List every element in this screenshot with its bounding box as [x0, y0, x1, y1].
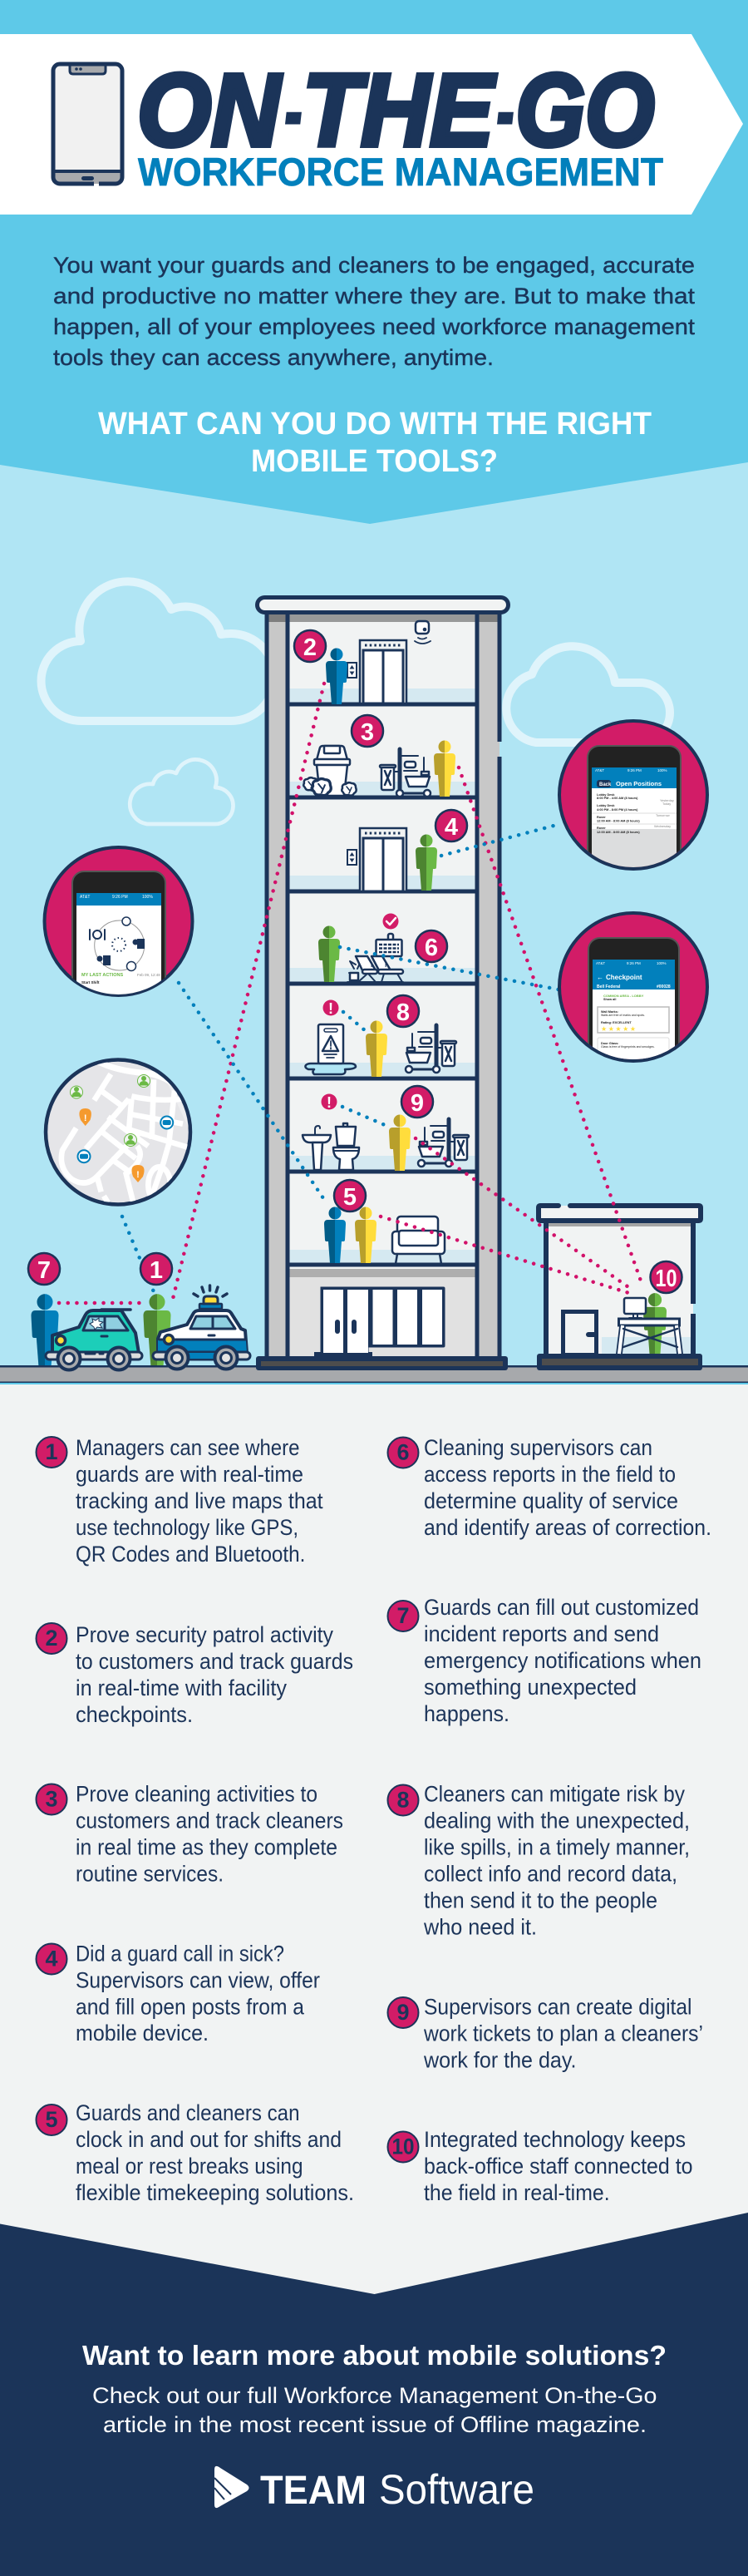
list item 7: Guards can fill out customized: [424, 1595, 699, 1620]
icon: cleaning cart: [418, 1119, 469, 1167]
callout: phone open positions app: Yesterday: [660, 799, 674, 802]
list item 7: happens.: [424, 1701, 509, 1726]
list item 10: 10: [392, 2134, 414, 2159]
callout: phone open positions app: AT&T: [595, 768, 604, 772]
list item 8: dealing with the unexpected,: [424, 1808, 690, 1833]
roof: [258, 597, 509, 612]
section question heading: MOBILE TOOLS?: [251, 444, 498, 479]
list item 8: then send it to the people: [424, 1888, 657, 1912]
list item 1: guards are with real-time: [76, 1462, 303, 1487]
callout: phone open positions app: 12:00 AM - 8:00 AM (8 hours): [597, 831, 640, 834]
list item 3: customers and track cleaners: [76, 1808, 343, 1833]
list item 2: to customers and track guards: [76, 1649, 353, 1674]
heading: Workforce Management: WORKFORCE MANAGEMENT: [138, 150, 663, 194]
ground: [0, 1365, 748, 1384]
header background chevron: [0, 0, 748, 524]
list item 8: like spills, in a timely manner,: [424, 1834, 690, 1859]
footer heading: Want to learn more about mobile solutions?: [82, 2340, 667, 2371]
section question heading: WHAT CAN YOU DO WITH THE RIGHT: [98, 407, 652, 442]
icon: elevator: [360, 828, 406, 891]
foundation slab: [537, 1354, 702, 1370]
intro paragraph: [53, 253, 696, 370]
heading: On-the-Go: THE: [303, 53, 496, 168]
footer text: Check out our full Workforce Management On-the-Go: [92, 2383, 657, 2408]
list item 4: and fill open posts from a: [76, 1994, 305, 2019]
heading: On-the-Go: [137, 52, 655, 168]
icon: elevator: [360, 640, 406, 703]
icon: computer desk: [617, 1298, 682, 1354]
list item 2: checkpoints.: [76, 1702, 193, 1727]
person: guard: [324, 1207, 346, 1263]
list item 5: [37, 2100, 354, 2205]
callout: phone checkpoint app: Rating: EXCELLENT: [601, 1021, 632, 1024]
badge 8: 8: [396, 999, 410, 1026]
panel: footer: [0, 2213, 748, 2576]
list item 6: 6: [396, 1440, 410, 1465]
floor: elevator and supervisor: [347, 828, 437, 891]
list item 9: [387, 1994, 703, 2072]
floor: washroom: [303, 1094, 469, 1171]
floor: spill: [305, 999, 456, 1077]
floor: guard at elevator with checkpoint: [326, 621, 431, 704]
map markers: !: [84, 1113, 87, 1123]
list item 1: use technology like GPS,: [76, 1515, 298, 1540]
callout: phone clock-in app: Start Shift: [81, 980, 100, 985]
callout: phone checkpoint app: [559, 913, 707, 1079]
list item 3: [37, 1781, 343, 1886]
sky background: [0, 449, 748, 1368]
footer text: [92, 2383, 657, 2437]
callout: phone clock-in app: MY LAST ACTIONS: [81, 973, 123, 978]
list item 9: work tickets to plan a cleaners’: [423, 2021, 703, 2046]
badge 6: 6: [425, 935, 438, 961]
list item 6: determine quality of service: [424, 1488, 678, 1513]
list item 1: tracking and live maps that: [76, 1488, 323, 1513]
callout: phone open positions app: 12:00 AM - 8:00 AM (8 hours): [597, 820, 640, 823]
icon: cleaning cart: [406, 1025, 456, 1073]
icon: teal car: [46, 1310, 142, 1370]
callout: phone checkpoint app: ←: [597, 974, 603, 981]
list item 4: Supervisors can view, offer: [76, 1967, 320, 1992]
list item 7: [387, 1595, 701, 1726]
list item 3: routine services.: [76, 1861, 224, 1886]
icon: armchair: [392, 1216, 445, 1264]
icon: siren: [194, 1286, 227, 1309]
badge 1: [140, 1253, 172, 1285]
person: cleaner: [355, 1207, 376, 1263]
icon: waiting chairs and plant: i: [385, 961, 386, 969]
callout: phone clock-in app: AT&T: [80, 895, 90, 900]
list item 2: 2: [45, 1626, 58, 1651]
callout: phone open positions app: 9:26 PM: [627, 768, 642, 772]
icon: alert: !: [328, 1000, 333, 1017]
list item 10: [387, 2127, 693, 2205]
person: supervisor: [318, 926, 340, 982]
list item 1: QR Codes and Bluetooth.: [76, 1542, 305, 1567]
callout: phone checkpoint app: Bell Federal: [597, 985, 621, 989]
foundation slab: [256, 1356, 508, 1370]
heading: On-the-Go: -: [495, 52, 515, 167]
badge 2: 2: [303, 634, 317, 661]
intro paragraph: You want your guards and cleaners to be engaged, accurate: [53, 253, 695, 278]
icon: police car: [153, 1286, 250, 1369]
roof: [539, 1206, 701, 1221]
icon: crumpled papers: [303, 777, 357, 796]
list item 2: [37, 1622, 353, 1727]
list item 5: 5: [45, 2107, 58, 2132]
list item 5: flexible timekeeping solutions.: [76, 2180, 354, 2205]
callout: phone clock-in app: [45, 847, 193, 1013]
callout: phone checkpoint app: Checkpoint: [606, 974, 642, 981]
badge 3: 3: [361, 719, 374, 746]
floor: trash and cleaner: [303, 740, 455, 797]
list item 8: who need it.: [423, 1914, 537, 1939]
icon: toilet: [333, 1123, 359, 1170]
callout: phone checkpoint app: AT&T: [596, 961, 605, 965]
badge 2: [294, 630, 326, 662]
icon: notice board: [376, 934, 402, 956]
icon: alert: [322, 999, 339, 1017]
list item 3: Prove cleaning activities to: [76, 1781, 317, 1806]
icon: water puddle: [305, 1063, 356, 1074]
panel: numbered list: [0, 1384, 748, 2299]
callout: phone open positions app: Today: [662, 802, 671, 806]
main office building: [256, 597, 509, 1370]
badge 1: 1: [150, 1257, 163, 1284]
icon: waiting chairs and plant: [347, 956, 403, 982]
person: guard 1: [143, 1294, 171, 1365]
logo: TEAM Software: Software: [379, 2466, 534, 2513]
list item 9: 9: [396, 2000, 410, 2025]
intro paragraph: happen, all of your employees need workforce management: [53, 314, 696, 339]
intro paragraph: tools they can access anywhere, anytime.: [53, 345, 494, 370]
callout: phone checkpoint app: Show all: [603, 998, 616, 1001]
list item 7: 7: [396, 1603, 410, 1628]
small office building: [537, 1206, 702, 1370]
badge 3: [352, 715, 383, 747]
callout: phone checkpoint app: Door Glass:: [601, 1042, 619, 1045]
list item 2: in real-time with facility: [76, 1675, 287, 1700]
icon: alert: !: [327, 1094, 332, 1111]
list item 10: Integrated technology keeps: [424, 2127, 686, 2152]
callout: phone open positions app: Wednesday: [654, 825, 671, 828]
badge 9: [401, 1086, 433, 1118]
building walls and floors: [267, 613, 499, 1357]
badge 8: [387, 995, 419, 1027]
callout: phone checkpoint app: COMMON AREA - LOBBY: [603, 994, 644, 998]
callout: phone open positions app: Back: [599, 782, 612, 787]
icon: call panel: [347, 663, 357, 678]
callout: phone open positions app: Lobby Desk: [597, 804, 615, 807]
list item 3: 3: [45, 1786, 58, 1811]
list item 1: Managers can see where: [76, 1435, 299, 1460]
list item 8: [387, 1781, 690, 1939]
callout: phone checkpoint app: Wall Marks:: [601, 1010, 618, 1014]
icon: door: [563, 1312, 597, 1355]
person: cleaner: [389, 1114, 411, 1171]
callout: phone open positions app: Rover: [597, 827, 606, 830]
icon: smartphone: [53, 64, 122, 184]
callout: phone checkpoint app: 9:26 PM: [627, 961, 641, 965]
title banner: [0, 34, 743, 215]
list item 4: mobile device.: [76, 2021, 209, 2046]
callout: phone checkpoint app: Glass is free of fingerprints and smudges.: [601, 1045, 655, 1049]
list item 7: emergency notifications when: [424, 1648, 701, 1673]
map markers: !: [136, 1170, 140, 1180]
badge 4: [436, 810, 467, 841]
list item 7: something unexpected: [424, 1675, 637, 1700]
list item 2: Prove security patrol activity: [76, 1622, 333, 1647]
list item 10: the field in real-time.: [424, 2180, 610, 2205]
number badges on illustration: [28, 630, 682, 1293]
list item 4: Did a guard call in sick?: [76, 1941, 284, 1966]
intro paragraph: and productive no matter where they are. But to make that: [53, 284, 696, 308]
icon: sink: [303, 1126, 331, 1170]
person: guard: [326, 649, 347, 704]
logo: TEAM Software: [214, 2466, 534, 2513]
lobby entrance doors: [314, 1287, 445, 1356]
list item 8: 8: [396, 1788, 410, 1813]
logo: TEAM Software: TEAM: [260, 2469, 367, 2513]
heading: On-the-Go: ON: [137, 53, 283, 168]
callout: phone clock-in app: Feb 09, 12:48: [137, 973, 160, 977]
floor colour bands: [288, 688, 477, 1265]
list item 9: work for the day.: [423, 2047, 577, 2072]
list item 4: [37, 1941, 320, 2046]
person: guard 7: [31, 1294, 59, 1365]
heading: On-the-Go: -: [283, 52, 303, 167]
icon: check mark: [382, 913, 399, 930]
callout: phone open positions app: [559, 721, 707, 887]
badge 10: 10: [655, 1266, 677, 1292]
list item 6: and identify areas of correction.: [424, 1515, 711, 1540]
list item 6: [387, 1435, 711, 1540]
section question heading: [98, 407, 652, 479]
callout: phone open positions app: Tomorrow: [656, 814, 670, 817]
list item 4: 4: [45, 1946, 58, 1971]
person: cleaner: [434, 740, 455, 797]
badge 6: [416, 930, 447, 962]
callout: phone checkpoint app: Walls are free of marks and spots.: [601, 1014, 645, 1017]
icon: trash can: [314, 746, 350, 796]
person: guard: [416, 835, 437, 891]
list item 8: collect info and record data,: [424, 1861, 677, 1886]
list item 5: meal or rest breaks using: [76, 2154, 303, 2179]
list item 10: back-office staff connected to: [424, 2154, 693, 2179]
callout: phone checkpoint app: ★★★★★: [601, 1025, 636, 1033]
heading: On-the-Go: GO: [515, 53, 655, 168]
badge 7: 7: [37, 1257, 51, 1284]
list item 1: [37, 1435, 323, 1567]
icon: waiting chairs and plant: i: [371, 961, 372, 969]
callout: phone checkpoint app: 100%: [657, 961, 667, 965]
icon: cleaning cart: [380, 749, 431, 797]
icon: wireless checkpoint sensor: [415, 621, 431, 644]
list item 7: incident reports and send: [424, 1621, 659, 1646]
floor: lounge: [324, 1207, 445, 1264]
badge 5: 5: [343, 1184, 357, 1211]
list item 6: Cleaning supervisors can: [424, 1435, 652, 1460]
icon: alert: [321, 1094, 337, 1111]
badge 7: [28, 1253, 60, 1285]
badge 9: 9: [411, 1090, 424, 1117]
footer text: article in the most recent issue of Offline magazine.: [103, 2412, 647, 2437]
icon: call panel: [347, 850, 357, 865]
callout: phone open positions app: 8:00 PM - 4:00 AM (8 hours): [597, 797, 638, 800]
badge 5: [334, 1180, 366, 1212]
callout: phone checkpoint app: #00028: [657, 985, 671, 989]
map markers: [70, 1074, 173, 1182]
list item 6: access reports in the field to: [424, 1462, 676, 1487]
list item 8: Cleaners can mitigate risk by: [424, 1781, 685, 1806]
callout: phone open positions app: Rover: [597, 816, 606, 819]
callout: phone open positions app: Open Positions: [616, 780, 662, 787]
list item 9: Supervisors can create digital: [424, 1994, 691, 2019]
callout: phone open positions app: 4:00 PM - 8:00 PM (4 hours): [597, 808, 638, 812]
list item 5: Guards and cleaners can: [76, 2100, 299, 2125]
badge 4: 4: [445, 814, 458, 841]
floor: inspection: [318, 913, 403, 982]
callout: phone open positions app: Lobby Desk: [597, 793, 615, 797]
person: cleaner: [366, 1021, 387, 1077]
callout: phone open positions app: 100%: [657, 768, 667, 772]
person: office staff: [643, 1293, 667, 1354]
icon: wet floor sign: [318, 1024, 343, 1063]
callout: live map: [46, 1054, 204, 1204]
callout: phone clock-in app: 100%: [142, 895, 153, 900]
callout: phone clock-in app: 9:26 PM: [112, 895, 128, 900]
list item 1: 1: [45, 1439, 58, 1464]
list item 3: in real time as they complete: [76, 1834, 337, 1859]
walls: [546, 1218, 693, 1355]
list item 5: clock in and out for shifts and: [76, 2127, 342, 2152]
dotted connector lines: [59, 683, 642, 1305]
clouds: [42, 581, 670, 824]
